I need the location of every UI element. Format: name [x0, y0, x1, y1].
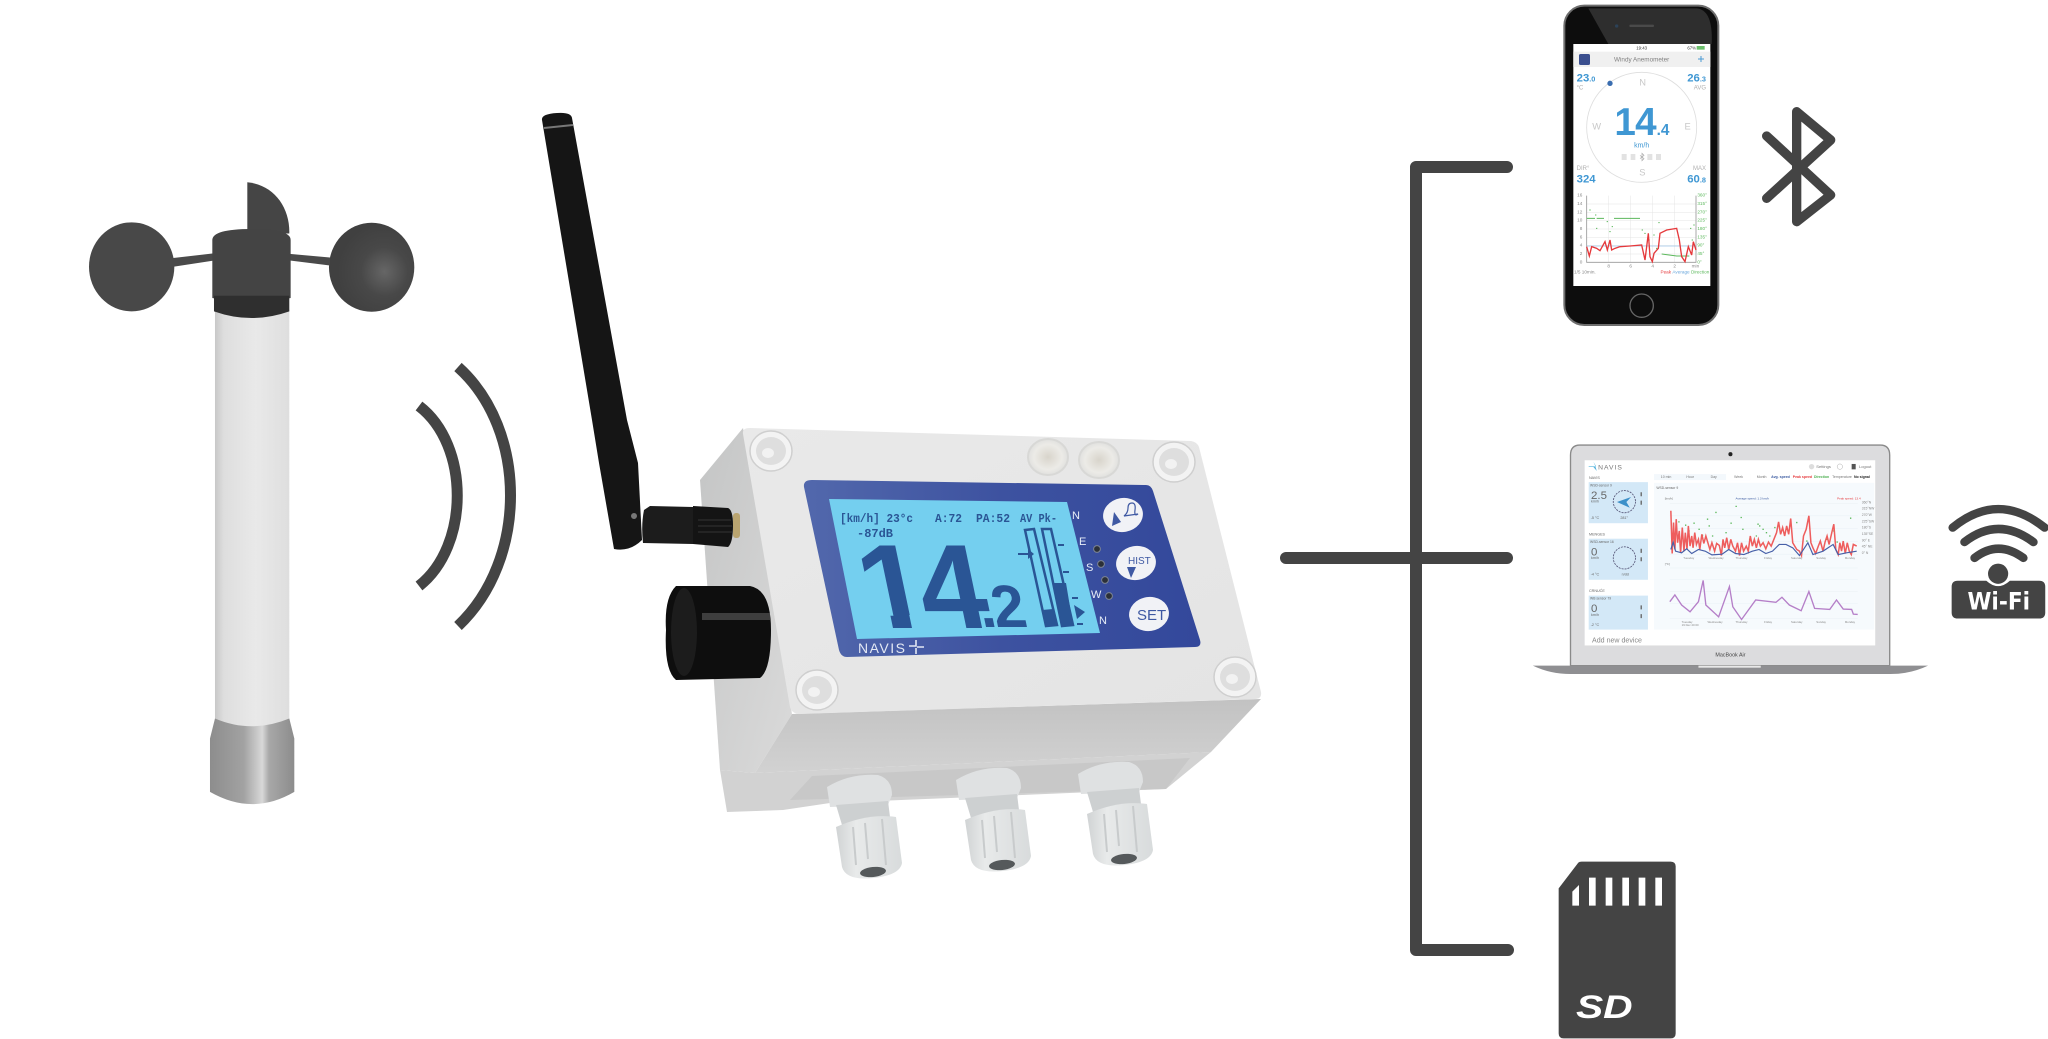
- phone wind chart: Peak Average Direction: [1660, 269, 1710, 274]
- direction letters: S: [1086, 562, 1093, 574]
- phone wind chart: 315°: [1697, 201, 1707, 206]
- home button: [1630, 294, 1653, 317]
- temperature chart: Saturday: [1791, 620, 1803, 624]
- wind speed chart: 135°SE: [1862, 532, 1874, 536]
- phone app: [1564, 6, 1718, 325]
- LCD readings: -87dB: [857, 527, 893, 541]
- compass dial: S: [1639, 168, 1645, 178]
- wind speed chart: Friday: [1764, 556, 1773, 560]
- wind speed chart: 45° NE: [1862, 544, 1873, 548]
- chart tabs: 10 min: [1661, 475, 1671, 479]
- phone wind chart: 4: [1651, 263, 1654, 268]
- LCD readings: A:72: [935, 512, 962, 526]
- temperature chart: [°C]: [1665, 562, 1670, 566]
- sidebar device cards: 281°: [1620, 516, 1628, 520]
- corner stats: 23.0: [1577, 73, 1595, 85]
- wind speed chart: Tuesday: [1683, 556, 1695, 560]
- phone app: DIR°: [1577, 166, 1590, 172]
- phone wind chart: 90°: [1697, 243, 1705, 248]
- temperature chart: [1665, 562, 1858, 627]
- HIST down button: [1113, 543, 1159, 583]
- SET button: SET: [1137, 607, 1166, 624]
- wind speed chart: Average speed: 1.3 km/h: [1735, 496, 1769, 500]
- sidebar device cards: km/h: [1591, 500, 1599, 504]
- LCD readings: AV Pk-: [1020, 512, 1057, 526]
- chart tabs: Month: [1757, 475, 1767, 479]
- sidebar device cards: -2 °C: [1591, 623, 1599, 627]
- rotor hub: [212, 229, 291, 302]
- wind speed chart: [km/h]: [1665, 497, 1673, 501]
- main speed value: 2: [985, 573, 1032, 640]
- phone wind chart: 16: [1577, 193, 1583, 198]
- corner stats: 324: [1577, 173, 1596, 185]
- status icons: [1622, 154, 1661, 160]
- wind speed chart: Peak speed: 13.4: [1837, 496, 1861, 500]
- icon: SD card: SD: [1576, 989, 1633, 1025]
- main speed value: .: [971, 573, 1001, 640]
- sidebar device cards: [1589, 476, 1648, 644]
- chart tabs: Direction: [1814, 475, 1829, 479]
- sidebar device cards: 0: [1591, 603, 1597, 615]
- phone wind chart: 10: [1577, 218, 1583, 223]
- chart tabs: No signal: [1854, 475, 1870, 479]
- white tube: [215, 309, 289, 732]
- laptop screen: [1585, 460, 1875, 645]
- temperature chart: Sunday: [1816, 620, 1827, 624]
- direction letters: N: [1099, 615, 1107, 627]
- light sensors: [1028, 439, 1119, 478]
- phone wind chart: 14: [1577, 201, 1583, 206]
- main speed value: 4: [904, 519, 999, 654]
- speed readout: [1614, 101, 1670, 149]
- cup arms: [170, 253, 330, 267]
- direction LEDs: [1094, 546, 1112, 599]
- sidebar device cards: 2.5: [1591, 490, 1607, 502]
- wind speed chart: 0° N: [1862, 551, 1869, 555]
- chart tabs: Day: [1711, 475, 1717, 479]
- box left side: [700, 428, 792, 773]
- phone wind chart: 8: [1607, 263, 1610, 268]
- mounting screws: [750, 431, 1256, 710]
- model name: MacBook Air: [1715, 653, 1746, 659]
- sidebar device cards: km/h: [1591, 556, 1599, 560]
- temperature chart: Friday: [1764, 620, 1773, 624]
- box lower rim: [720, 752, 1211, 812]
- icon: rear wind cup: [247, 182, 289, 233]
- box front skirt: [755, 699, 1261, 773]
- phone wind chart: 12: [1577, 209, 1583, 214]
- wifi arcs: [1953, 509, 2045, 558]
- phone wind chart: [1574, 193, 1710, 274]
- anemometer sensor: [89, 182, 414, 804]
- phone app: MAX: [1693, 166, 1706, 172]
- sidebar device cards: WB sensor 79: [1590, 596, 1611, 600]
- sidebar device cards: -5 °C: [1591, 516, 1599, 520]
- direction letters: E: [1079, 536, 1086, 548]
- LCD readings: [840, 512, 1085, 654]
- phone wind chart: 225°: [1697, 218, 1707, 223]
- antenna: [542, 113, 642, 550]
- direction letters: [1072, 510, 1107, 627]
- metal foot: [210, 718, 294, 804]
- control panel: [804, 480, 1200, 657]
- main speed value: 1: [845, 519, 940, 654]
- chart tabs: Hour: [1686, 475, 1695, 479]
- corner stats: 60.8: [1687, 173, 1706, 185]
- signal waves: [419, 367, 510, 626]
- icon: SD card: [1559, 862, 1676, 1038]
- speed readout: .4: [1657, 122, 1670, 139]
- NAVIS brand: NAVIS: [858, 640, 905, 656]
- sidebar device cards: n/dd: [1622, 572, 1629, 576]
- LCD screen: [829, 499, 1100, 639]
- temperature chart: 19 Dec 20:00: [1682, 623, 1699, 627]
- phone app: 67%: [1687, 46, 1696, 51]
- direction letters: N: [1072, 510, 1080, 522]
- laptop base: [1533, 666, 1928, 674]
- sidebar device cards: CRNUĆE: [1589, 588, 1605, 593]
- LCD readings: [km/h] 23°c: [840, 512, 913, 526]
- wifi badge: [1952, 581, 2045, 619]
- app title bar: Windy Anemometer: [1614, 56, 1669, 63]
- box front face: [743, 428, 1261, 714]
- sidebar device cards: NAVIS: [1589, 476, 1600, 480]
- phone body: [1564, 6, 1718, 325]
- laptop dashboard: [1533, 445, 1928, 674]
- chart tabs: Temperature: [1832, 475, 1852, 479]
- temperature chart: Tuesday: [1682, 620, 1693, 624]
- bar graphs: [1025, 529, 1073, 626]
- icon: wi-fi: [1952, 509, 2045, 619]
- phone wind chart: 45°: [1697, 251, 1705, 256]
- HIST down button: HIST: [1128, 556, 1151, 567]
- corner stats: 26.3: [1687, 73, 1706, 85]
- phone app: AVG: [1694, 86, 1706, 92]
- chart tabs: Avg. speed: [1771, 475, 1790, 479]
- SET button: [1127, 594, 1171, 634]
- LCD readings: PA:52: [976, 512, 1010, 526]
- cable glands: [827, 762, 1153, 879]
- temperature chart: Wednesday: [1708, 620, 1723, 624]
- corner stats: [1577, 73, 1706, 185]
- sidebar device cards: 0: [1591, 547, 1597, 559]
- laptop dashboard: WSD-sensor 9: [1656, 486, 1678, 490]
- phone wind chart: 1/5 10min.: [1574, 269, 1596, 274]
- phone wind chart: 2: [1580, 251, 1583, 256]
- chart tabs: Peak speed: [1793, 475, 1812, 479]
- phone wind chart: 8: [1580, 226, 1583, 231]
- phone wind chart: 0: [1580, 259, 1583, 264]
- compass dial: E: [1685, 122, 1691, 132]
- wind speed chart: 360°N: [1862, 501, 1872, 505]
- left wind cup: [89, 222, 174, 311]
- main speed value: [845, 519, 1032, 654]
- sidebar device cards: MENGES: [1589, 532, 1606, 536]
- collar: [214, 296, 289, 318]
- wind speed chart: [1665, 496, 1875, 560]
- phone wind chart: 270°: [1697, 209, 1707, 214]
- phone wind chart: min: [1692, 263, 1700, 268]
- wind speed chart: 180°S: [1862, 526, 1872, 530]
- phone wind chart: 0°: [1697, 259, 1702, 264]
- temperature chart: Monday: [1845, 620, 1856, 624]
- dashboard header: Logout: [1859, 464, 1872, 469]
- wind speed chart: Saturday: [1791, 556, 1803, 560]
- wind speed chart: 315°NW: [1862, 507, 1875, 511]
- antenna connector: [642, 506, 740, 547]
- wind speed chart: 270°W: [1862, 513, 1873, 517]
- sidebar device cards: km/h: [1591, 613, 1599, 617]
- phone wind chart: 2: [1673, 263, 1676, 268]
- phone wind chart: 6: [1580, 234, 1583, 239]
- phone wind chart: 180°: [1697, 226, 1707, 231]
- wind speed chart: 225°SW: [1862, 520, 1875, 524]
- phone wind chart: 135°: [1697, 234, 1707, 239]
- temperature chart: Thursday: [1735, 620, 1748, 624]
- black knob: [666, 586, 771, 680]
- dashboard charts panel: [1654, 483, 1874, 630]
- phone wind chart: 6: [1629, 263, 1632, 268]
- wind speed chart: 90° E: [1862, 538, 1871, 542]
- wind speed chart: Sunday: [1816, 556, 1827, 560]
- receiver unit: [542, 113, 1261, 879]
- icon: bluetooth: [1767, 112, 1831, 222]
- status bar: 19:43: [1636, 46, 1648, 51]
- wind speed chart: Wednesday: [1709, 556, 1724, 560]
- wind speed chart: Thursday: [1735, 556, 1748, 560]
- wind speed chart: Monday: [1845, 556, 1856, 560]
- right wind cup: [329, 223, 414, 312]
- dashboard header: Settings: [1816, 464, 1831, 469]
- sidebar device cards: -4 °C: [1591, 573, 1599, 577]
- bell up button: [1100, 495, 1146, 535]
- compass dial: N: [1639, 78, 1646, 88]
- speed readout: km/h: [1634, 142, 1649, 149]
- phone wind chart: 4: [1580, 243, 1583, 248]
- dashboard header: NAVIS: [1598, 465, 1623, 472]
- compass dial: W: [1592, 122, 1601, 132]
- phone wind chart: 360°: [1697, 193, 1707, 198]
- sidebar device cards: WSD-sensor 16: [1590, 540, 1614, 544]
- chart tabs: Week: [1734, 475, 1743, 479]
- phone app: °C: [1577, 86, 1584, 92]
- sidebar device cards: WSD-sensor 9: [1590, 484, 1612, 488]
- dashboard header: [1589, 462, 1872, 472]
- connector tree: [1286, 167, 1508, 950]
- speed readout: 14: [1614, 101, 1657, 144]
- sidebar device cards: Add new device: [1592, 637, 1642, 644]
- direction letters: W: [1091, 589, 1102, 601]
- laptop lid: [1571, 445, 1890, 666]
- chart tabs: [1654, 474, 1870, 480]
- icon: wi-fi: Wi-Fi: [1967, 586, 2030, 615]
- phone screen: [1573, 44, 1710, 286]
- compass dial: [1587, 72, 1697, 182]
- app title bar: [1573, 52, 1710, 67]
